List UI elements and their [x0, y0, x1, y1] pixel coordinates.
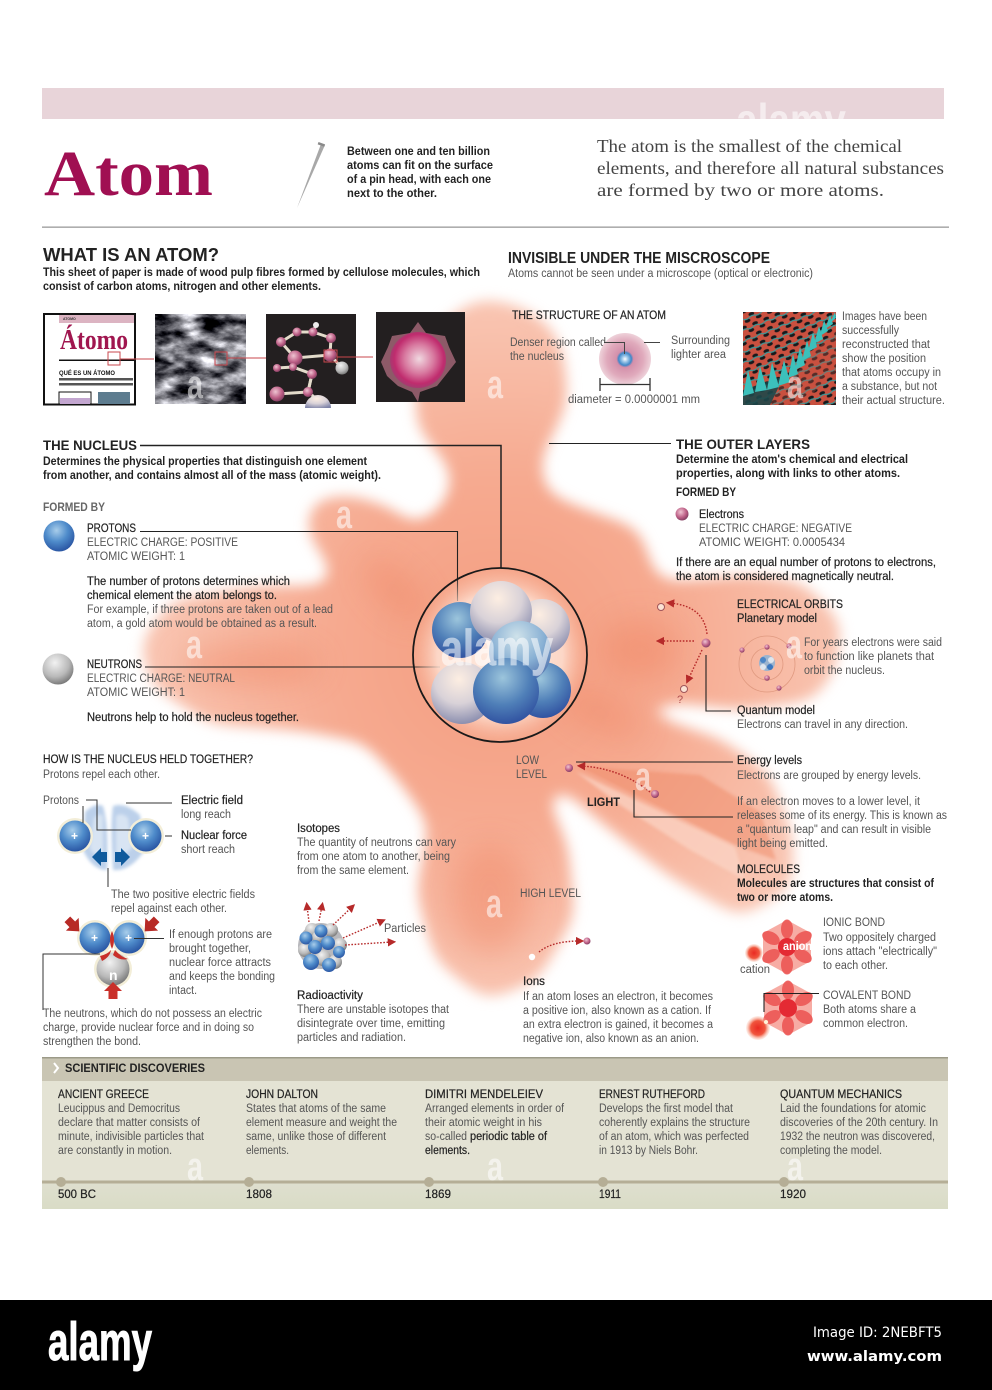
panel: atom close-up [376, 312, 465, 402]
column: ernest rutheford: in 1913 by Niels Bohr. [599, 1145, 698, 1157]
panel: scientific discoveries timeline [42, 1057, 948, 1209]
covalent bond text: common electron. [823, 1018, 908, 1030]
protons text: atom, a gold atom would be obtained as a result. [87, 618, 317, 630]
quantum and energy text: light being emitted. [737, 838, 828, 850]
isotopes text: from one atom to another, being [297, 851, 450, 863]
heading: what is an atom: WHAT IS AN ATOM? [43, 245, 219, 265]
ions text: Ions [523, 976, 545, 988]
quantum and energy text: Quantum model [737, 705, 815, 717]
diagram: ionic bond: anion [783, 941, 812, 953]
column: john dalton: JOHN DALTON [246, 1089, 318, 1101]
atom diagram [599, 333, 660, 391]
panel: structure of an atom [510, 310, 730, 406]
column: ancient greece: Leucippus and Democritus [58, 1103, 180, 1115]
icon: pin [297, 142, 325, 208]
neutrons text: ATOMIC WEIGHT: 1 [87, 687, 185, 699]
protons text: For example, if three protons are taken out of a lead [87, 604, 333, 616]
quantum and energy text: If an electron moves to a lower level, it [737, 796, 921, 808]
heading: invisible under the microscope: Atoms cannot be seen under a microscope (optical or electronic) [508, 268, 813, 280]
column: ernest rutheford: ERNEST RUTHEFORD [599, 1089, 705, 1101]
column: quantum mechanics: 1932 the neutron was discovered, [780, 1131, 935, 1143]
section: outer layers: THE OUTER LAYERS [676, 436, 810, 452]
watermarks: a [187, 363, 204, 407]
column: dimitri mendeleiev: DIMITRI MENDELEIEV [425, 1089, 543, 1101]
watermarks [186, 94, 846, 1189]
pin head caption: of a pin head, with each one [347, 174, 491, 186]
panel: page thumbnail: ATOMO [63, 317, 76, 321]
column: john dalton: States that atoms of the same [246, 1103, 386, 1115]
diagram: ionic bond [740, 920, 814, 976]
electrical orbits text [737, 599, 942, 677]
radioactivity text: Radioactivity [297, 990, 363, 1002]
column: ancient greece: minute, indivisible particles that [58, 1131, 205, 1143]
quantum and energy text: Electrons are grouped by energy levels. [737, 770, 921, 782]
electrons text: If there are an equal number of protons to electrons, [676, 557, 936, 569]
reconstructed image caption [842, 311, 945, 407]
neutrons text: Neutrons help to hold the nucleus together. [87, 712, 299, 724]
protons text: ATOMIC WEIGHT: 1 [87, 551, 185, 563]
intro text: The atom is the smallest of the chemical [597, 136, 902, 156]
reconstructed image caption: that atoms occupy in [842, 367, 941, 379]
footer bar: alamy [48, 1312, 152, 1372]
section: the nucleus: FORMED BY [43, 502, 105, 514]
reconstructed image caption: a substance, but not [842, 381, 938, 393]
watermarks: alamy [441, 620, 553, 676]
icon: proton [44, 520, 74, 552]
watermarks: a [787, 363, 804, 407]
protons text: The number of protons determines which [87, 576, 290, 588]
top pink band [42, 88, 944, 119]
diagram: ion electron [529, 938, 590, 960]
bonding text: If enough protons are [169, 929, 272, 941]
section: outer layers: FORMED BY [676, 487, 736, 499]
column: quantum mechanics: Laid the foundations for atomic [780, 1103, 926, 1115]
section: the nucleus: Determines the physical properties that distinguish one element [43, 456, 367, 468]
icon: neutron [42, 654, 74, 684]
bonding text: intact. [169, 985, 197, 997]
column: dimitri mendeleiev: 1869 [425, 1189, 451, 1201]
energy level diagram [516, 755, 659, 900]
repel labels: Electric field [181, 795, 243, 807]
covalent bond text: COVALENT BOND [823, 990, 911, 1002]
repel labels: short reach [181, 844, 235, 856]
isotopes text [297, 823, 456, 877]
timeline heading: SCIENTIFIC DISCOVERIES [65, 1063, 205, 1075]
reconstructed image caption: show the position [842, 353, 926, 365]
bonding text [43, 929, 275, 1048]
watermarks: a [786, 623, 803, 667]
neutrons text: ELECTRIC CHARGE: NEUTRAL [87, 673, 236, 685]
panel: reconstructed atom image [743, 312, 836, 405]
column: dimitri mendeleiev: Arranged elements in order of [425, 1103, 565, 1115]
radioactivity text [297, 990, 450, 1044]
column: quantum mechanics: completing the model. [780, 1145, 882, 1157]
column: ernest rutheford: Develops the first model that [599, 1103, 734, 1115]
intro text: are formed by two or more atoms. [597, 180, 884, 200]
energy level diagram: LOW [516, 755, 539, 767]
watermarks: a [187, 1145, 204, 1189]
watermarks: a [787, 1145, 804, 1189]
electrical orbits text: Planetary model [737, 613, 817, 625]
diagram: radioactive nucleus [298, 906, 392, 972]
intro text [597, 136, 944, 200]
column: quantum mechanics: QUANTUM MECHANICS [780, 1089, 902, 1101]
column: quantum mechanics: 1920 [780, 1189, 806, 1201]
quantum and energy text: Energy levels [737, 755, 802, 767]
panel: cellulose molecule [266, 314, 373, 408]
bonding text: and keeps the bonding [169, 971, 275, 983]
ionic bond text: IONIC BOND [823, 917, 885, 929]
panel: structure of an atom: THE STRUCTURE OF AN ATOM [512, 310, 666, 322]
diagram: quantum electron paths: ? [677, 694, 683, 706]
watermarks: a [336, 493, 353, 537]
electrical orbits text: ELECTRICAL ORBITS [737, 599, 843, 611]
ions text [523, 976, 714, 1045]
ions text: an extra electron is gained, it becomes a [523, 1019, 714, 1031]
diagram: planetary model [739, 636, 795, 692]
molecules text: MOLECULES [737, 864, 800, 876]
ionic bond text: to each other. [823, 960, 888, 972]
ions text: negative ion, also known as an anion. [523, 1033, 699, 1045]
panel: page thumbnail: Átomo [60, 325, 128, 356]
energy level diagram: LEVEL [516, 769, 548, 781]
title: Atom [44, 138, 213, 210]
pin head caption: atoms can fit on the surface [347, 160, 493, 172]
section: outer layers: Determine the atom's chemical and electrical [676, 454, 908, 466]
column: quantum mechanics: discoveries of the 20th century. In [780, 1117, 938, 1129]
panel: structure of an atom: Surrounding [671, 335, 730, 347]
isotopes text: The quantity of neutrons can vary [297, 837, 456, 849]
ions text: If an atom loses an electron, it becomes [523, 991, 713, 1003]
column: ancient greece: 500 BC [58, 1189, 96, 1201]
diagram: covalent bond [746, 980, 819, 1040]
ionic bond text [823, 917, 937, 972]
pin head caption [347, 146, 493, 200]
neutrons text: NEUTRONS [87, 659, 142, 671]
section: the nucleus: from another, and contains almost all of the mass (atomic weight). [43, 470, 381, 482]
panel: structure of an atom: the nucleus [510, 351, 564, 363]
column: dimitri mendeleiev: so-called [425, 1131, 467, 1143]
reconstructed image caption: reconstructed that [842, 339, 931, 351]
column: john dalton [244, 1089, 397, 1201]
column: john dalton: elements. [246, 1145, 289, 1157]
energy level diagram: LIGHT [587, 797, 620, 809]
diagram: ionic bond: cation [740, 964, 770, 976]
diagram: bonded protons and neutron [43, 913, 164, 1010]
orange cloud background [147, 306, 835, 993]
diagram: bonded protons and neutron: + [125, 931, 132, 945]
watermarks: alamy [736, 94, 846, 146]
heading: what is an atom: consist of carbon atoms, nitrogen and other elements. [43, 281, 321, 293]
electrical orbits text: For years electrons were said [804, 637, 942, 649]
panel: page thumbnail [44, 314, 154, 404]
column: john dalton: same, unlike those of different [246, 1131, 387, 1143]
bonding text: nuclear force attracts [169, 957, 271, 969]
heading: what is an atom: This sheet of paper is made of wood pulp fibres formed by cellulose molecules, which [43, 267, 480, 279]
electrical orbits text: orbit the nucleus. [804, 665, 885, 677]
radioactivity text: disintegrate over time, emitting [297, 1018, 445, 1030]
repel labels: The two positive electric fields [111, 889, 255, 901]
section: the nucleus: THE NUCLEUS [43, 437, 137, 453]
section: how is the nucleus held together: Protons repel each other. [43, 769, 160, 781]
panel: structure of an atom: lighter area [671, 349, 727, 361]
section: outer layers: properties, along with links to other atoms. [676, 468, 900, 480]
repel labels: long reach [181, 809, 231, 821]
diagram: repelling protons [57, 800, 172, 887]
nucleus leader lines [140, 444, 733, 817]
energy level diagram: HIGH LEVEL [520, 888, 582, 900]
repel labels [43, 795, 255, 915]
covalent bond text: Both atoms share a [823, 1004, 917, 1016]
watermarks: a [186, 623, 203, 667]
heading: invisible under the microscope [508, 250, 813, 280]
panel: page thumbnail: QUÉ ES UN ÁTOMO [59, 368, 115, 377]
quantum and energy text: a "quantum leap" and can result in visible [737, 824, 931, 836]
pin head caption: Between one and ten billion [347, 146, 490, 158]
section: how is the nucleus held together: HOW IS THE NUCLEUS HELD TOGETHER? [43, 754, 253, 766]
footer bar: Image ID: 2NEBFT5 [813, 1325, 942, 1341]
diagram: repelling protons: + [71, 829, 78, 843]
watermarks: a [487, 363, 504, 407]
protons text: chemical element the atom belongs to. [87, 590, 277, 602]
quantum and energy text: releases some of its energy. This is known as [737, 810, 947, 822]
radioactivity text: particles and radiation. [297, 1032, 406, 1044]
electrons text: Electrons [699, 509, 744, 521]
column: ernest rutheford [598, 1089, 750, 1201]
ionic bond text: ions attach "electrically" [823, 946, 937, 958]
bonding text: The neutrons, which do not possess an electric [43, 1008, 262, 1020]
molecules text: two or more atoms. [737, 892, 833, 904]
repel labels: Protons [43, 795, 79, 807]
isotopes text: Isotopes [297, 823, 340, 835]
electrons text [676, 509, 936, 583]
particles label: Particles [384, 923, 426, 935]
column: ancient greece: declare that matter consists of [58, 1117, 201, 1129]
protons text [87, 523, 333, 630]
section: the nucleus [43, 437, 381, 514]
heading: invisible under the microscope: INVISIBLE UNDER THE MISCROSCOPE [508, 250, 770, 267]
electrical orbits text: to function like planets that [804, 651, 935, 663]
reconstructed image caption: successfully [842, 325, 899, 337]
column: ancient greece [56, 1089, 205, 1201]
panel: structure of an atom: Denser region called [510, 337, 606, 349]
diagram: bonded protons and neutron: n [109, 967, 118, 983]
column: ancient greece: ANCIENT GREECE [58, 1089, 149, 1101]
column: john dalton: element measure and weight the [246, 1117, 397, 1129]
panel: paper fibre photo [155, 314, 266, 404]
pin head caption: next to the other. [347, 188, 437, 200]
column: dimitri mendeleiev: their atomic weight in his [425, 1117, 542, 1129]
protons text: PROTONS [87, 523, 136, 535]
diagram: repelling protons: + [142, 829, 149, 843]
electrons text: the atom is considered magnetically neutral. [676, 571, 894, 583]
ionic bond text: Two oppositely charged [823, 932, 936, 944]
column: dimitri mendeleiev: periodic table of [470, 1131, 548, 1143]
diagram: bonded protons and neutron: + [91, 931, 98, 945]
reconstructed image caption: their actual structure. [842, 395, 945, 407]
column: ernest rutheford: coherently explains the structure [599, 1117, 750, 1129]
reconstructed image caption: Images have been [842, 311, 927, 323]
electrons text: ELECTRIC CHARGE: NEGATIVE [699, 523, 852, 535]
column: ernest rutheford: 1911 [599, 1189, 621, 1201]
molecules text [737, 864, 934, 904]
repel labels: Nuclear force [181, 830, 247, 842]
isotopes text: from the same element. [297, 865, 409, 877]
neutrons text [87, 659, 299, 724]
ions text: a positive ion, also known as a cation. If [523, 1005, 712, 1017]
column: ernest rutheford: of an atom, which was perfected [599, 1131, 749, 1143]
footer bar [0, 1300, 992, 1390]
electrons text: ATOMIC WEIGHT: 0.0005434 [699, 537, 846, 549]
heading: what is an atom [43, 245, 480, 293]
column: john dalton: 1808 [246, 1189, 272, 1201]
quantum and energy text: Electrons can travel in any direction. [737, 719, 908, 731]
watermarks: a [486, 882, 503, 926]
molecules text: Molecules are structures that consist of [737, 878, 934, 890]
bonding text: brought together, [169, 943, 251, 955]
radioactivity text: There are unstable isotopes that [297, 1004, 450, 1016]
watermarks: a [487, 1145, 504, 1189]
repel labels: repel against each other. [111, 903, 227, 915]
protons text: ELECTRIC CHARGE: POSITIVE [87, 537, 238, 549]
bonding text: charge, provide nuclear force and in doing so [43, 1022, 254, 1034]
column: dimitri mendeleiev [424, 1089, 565, 1201]
footer bar: www.alamy.com [807, 1349, 942, 1365]
diagram: quantum electron paths [658, 603, 710, 706]
section: how is the nucleus held together [43, 754, 253, 781]
column: dimitri mendeleiev: elements. [425, 1145, 470, 1157]
quantum and energy text [737, 705, 947, 850]
panel: structure of an atom: diameter = 0.0000001 mm [568, 394, 700, 406]
watermarks: a [635, 755, 652, 799]
icon: electron [676, 508, 688, 520]
section: outer layers [676, 436, 908, 499]
covalent bond text [823, 990, 917, 1030]
intro text: elements, and therefore all natural substances [597, 158, 944, 178]
column: ancient greece: are constantly in motion. [58, 1145, 172, 1157]
column: quantum mechanics [779, 1089, 938, 1201]
bonding text: strengthen the bond. [43, 1036, 141, 1048]
central nucleus illustration [413, 568, 587, 742]
